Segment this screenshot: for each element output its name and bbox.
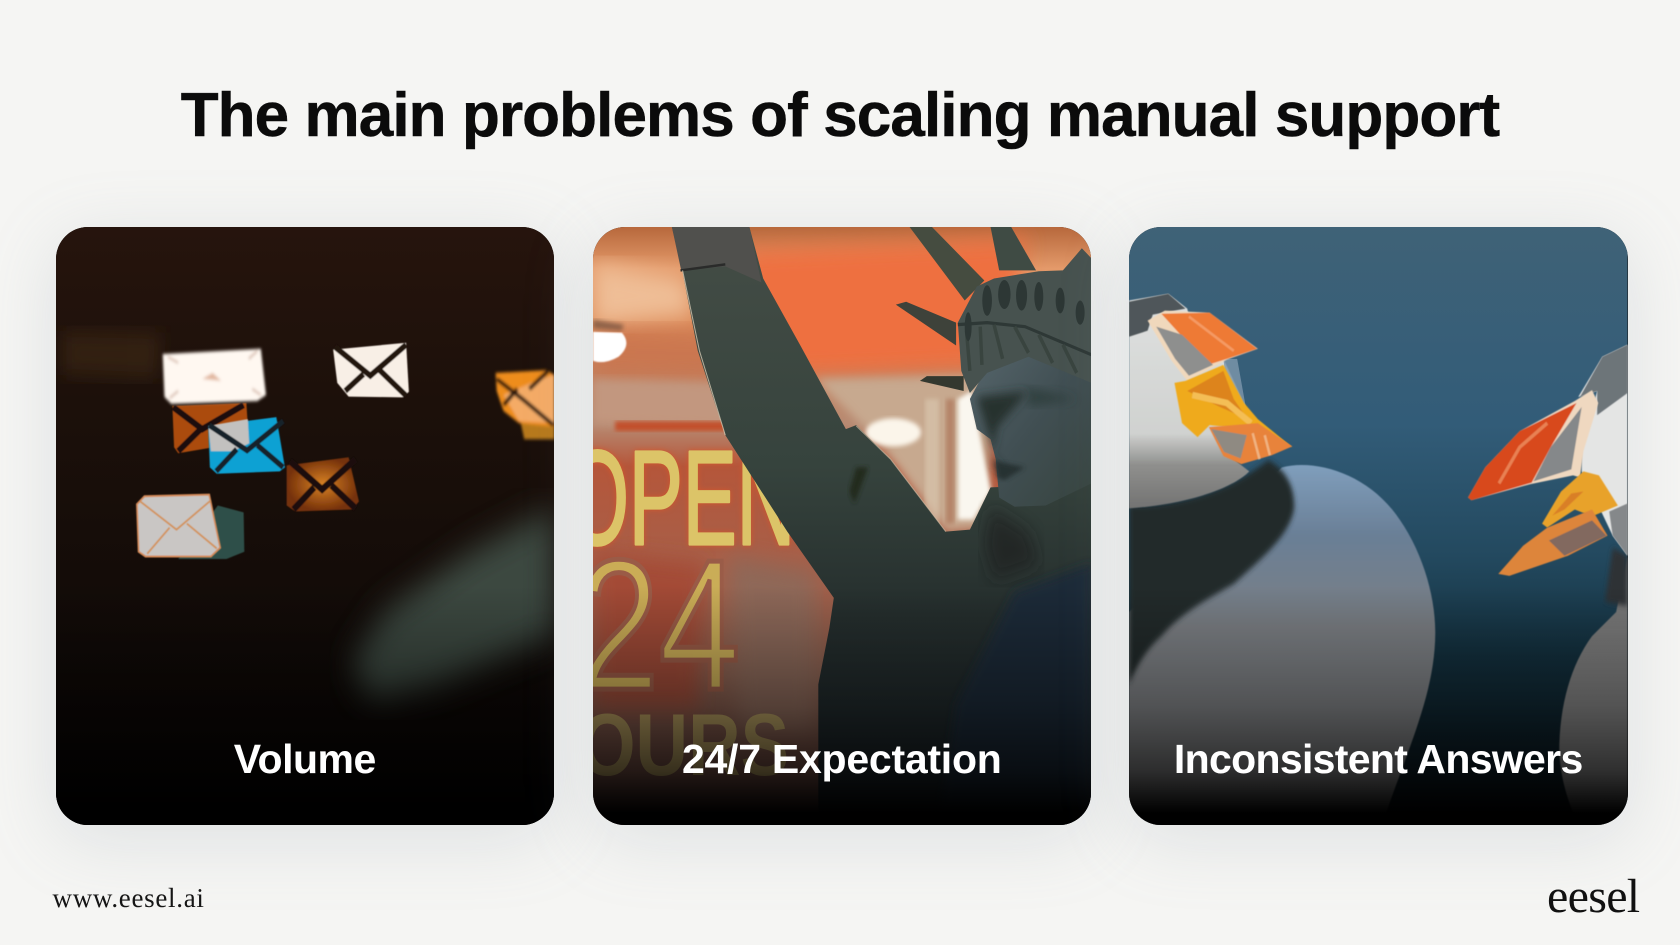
card label: Inconsistent Answers — [1174, 736, 1583, 782]
icon: white envelope — [333, 343, 408, 397]
left puffin body — [1129, 465, 1435, 825]
icon: orange envelope — [172, 403, 248, 453]
photo: two arguing puffins — [1129, 227, 1628, 825]
icon: pale envelope — [136, 495, 220, 557]
right puffin head — [1578, 345, 1628, 556]
icon: cropped orange envelope — [495, 370, 554, 439]
left puffin collar — [1129, 460, 1294, 684]
icon: ceiling lamp — [592, 332, 626, 362]
left puffin yellow mouth — [1174, 365, 1292, 447]
gradient overlay — [1129, 227, 1628, 825]
statue body and raised arm — [671, 227, 1091, 825]
panel: Inconsistent Answers card — [1129, 227, 1628, 825]
icon: bright white envelope — [162, 349, 266, 404]
photo: glowing envelopes in the dark — [56, 227, 554, 825]
icon: amber envelope — [286, 457, 358, 512]
statue crown — [957, 248, 1091, 393]
right puffin lower beak — [1498, 510, 1608, 576]
footer: website url: www.eesel.ai — [52, 883, 205, 913]
left puffin head — [1129, 294, 1249, 508]
icon: blue envelope — [208, 417, 284, 474]
card label: Volume — [234, 736, 376, 782]
neon sign: OPEN 24 HOURS — [565, 424, 795, 794]
statue face — [969, 347, 1091, 507]
card label: 24/7 Expectation — [682, 736, 1002, 782]
right puffin upper beak — [1468, 390, 1598, 500]
title: The main problems of scaling manual support — [181, 81, 1499, 150]
right puffin mouth — [1542, 471, 1618, 528]
statue crown rays — [909, 227, 984, 301]
panel: 24/7 Expectation card — [592, 227, 1091, 825]
gradient overlay — [592, 227, 1091, 825]
panel: Volume card — [56, 227, 554, 825]
left puffin lower beak — [1209, 423, 1292, 464]
left puffin upper beak — [1148, 311, 1258, 381]
icon: teal envelope — [178, 506, 244, 559]
right puffin body — [1559, 556, 1628, 825]
gradient overlay — [56, 227, 554, 825]
photo: statue of liberty and neon sign — [592, 227, 1091, 825]
logo: eesel wordmark: eesel — [1547, 870, 1639, 923]
